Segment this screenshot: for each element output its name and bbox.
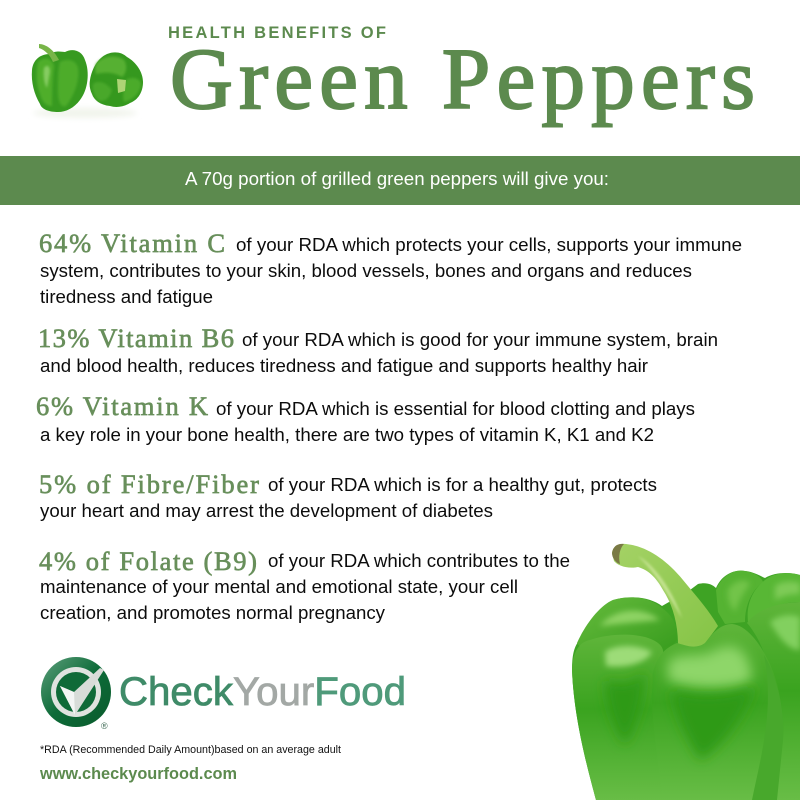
text block: fibre: 5% of Fibre/Fiber — [39, 469, 259, 499]
text block: vitamin K: a key role in your bone health, there are two types of vitamin K, K1 and K2 — [40, 425, 654, 446]
text block: vitamin C: 64% Vitamin C — [39, 228, 225, 258]
text block: folate: creation, and promotes normal pregnancy — [40, 603, 386, 624]
icon: two small green peppers — [32, 44, 143, 118]
text block: vitamin K — [36, 391, 695, 446]
text block: folate: maintenance of your mental and emotional state, your cell — [40, 577, 518, 598]
text block: folate: 4% of Folate (B9) — [39, 546, 257, 576]
heading: health benefits of: HEALTH BENEFITS OF — [168, 24, 386, 42]
banner: A 70g portion of grilled green peppers will give you: — [185, 169, 609, 190]
text block: vitamin B6: of your RDA which is good for your immune system, brain — [242, 330, 718, 351]
icon: large green pepper — [572, 544, 800, 800]
text block: vitamin B6 — [38, 323, 718, 377]
logo: CheckYourFood: CheckYourFood — [119, 670, 406, 714]
text block: vitamin C: system, contributes to your skin, blood vessels, bones and organs and reduces — [40, 261, 692, 282]
text block: vitamin K: of your RDA which is essential for blood clotting and plays — [216, 399, 695, 420]
title: Green Peppers: Green Peppers — [170, 30, 755, 127]
text block: vitamin K: 6% Vitamin K — [36, 391, 208, 421]
logo: CheckYourFood — [41, 657, 406, 731]
text block: fibre: of your RDA which is for a healthy gut, protects — [268, 475, 657, 496]
text block: vitamin C: of your RDA which protects your cells, supports your immune — [236, 235, 742, 256]
text block: vitamin C — [39, 228, 742, 308]
text block: fibre — [39, 469, 657, 522]
text block: vitamin B6: and blood health, reduces tiredness and fatigue and supports healthy hair — [40, 356, 648, 377]
text block: vitamin C: tiredness and fatigue — [40, 287, 213, 308]
text block: fibre: your heart and may arrest the development of diabetes — [40, 501, 493, 522]
website url: www.checkyourfood.com — [39, 765, 237, 783]
banner — [0, 156, 800, 205]
icon: check mark badge — [41, 657, 111, 727]
text block: vitamin B6: 13% Vitamin B6 — [38, 323, 234, 353]
footnote: *RDA (Recommended Daily Amount)based on an average adult — [40, 744, 341, 756]
logo: CheckYourFood: ® — [101, 721, 108, 731]
text block: folate: of your RDA which contributes to the — [268, 551, 570, 572]
text block: folate — [39, 546, 570, 624]
